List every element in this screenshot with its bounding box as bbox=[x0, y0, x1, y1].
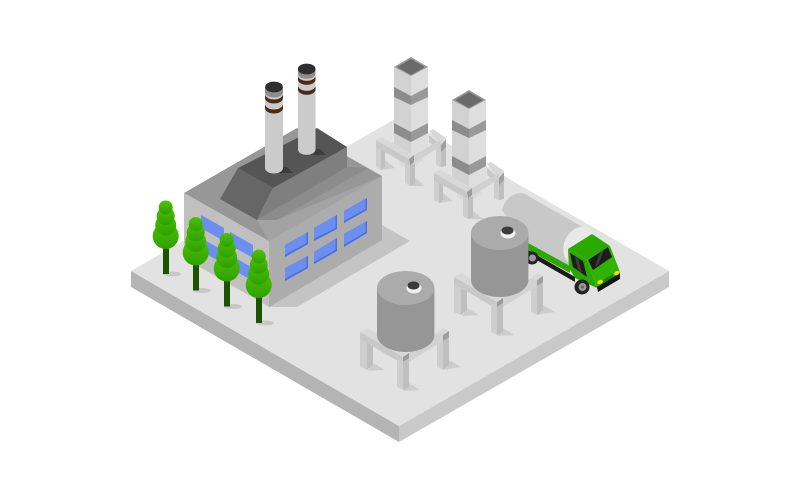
truck tank end bbox=[557, 221, 603, 271]
truck bbox=[502, 193, 621, 294]
rear wheel bbox=[526, 252, 538, 264]
chimney: right bbox=[298, 64, 326, 155]
tree 1 bbox=[153, 200, 181, 276]
chimney: left bbox=[265, 82, 293, 174]
tree 2 bbox=[183, 217, 211, 293]
windows: left wall bbox=[201, 215, 253, 281]
factory ground shadow bbox=[269, 225, 410, 307]
windows: right wall bbox=[285, 198, 367, 281]
cab bbox=[568, 234, 621, 292]
tree 4 bbox=[246, 250, 274, 326]
square stack tower 1 bbox=[376, 57, 446, 186]
tree 3 bbox=[214, 233, 242, 309]
platform base bbox=[131, 116, 669, 442]
square stack tower 2 bbox=[434, 90, 504, 219]
truck tank bbox=[502, 193, 586, 270]
headlights bbox=[596, 279, 604, 285]
storage tank front bbox=[360, 271, 461, 391]
truck bed bbox=[528, 243, 570, 273]
front wheel bbox=[574, 280, 590, 294]
factory roof bbox=[184, 128, 382, 241]
grille bbox=[603, 274, 613, 283]
factory building bbox=[184, 64, 410, 307]
bumper bbox=[597, 273, 620, 292]
cab windows bbox=[588, 247, 612, 270]
factory right wall bbox=[269, 176, 382, 307]
factory left wall bbox=[184, 193, 269, 307]
storage tank rear bbox=[454, 216, 555, 336]
